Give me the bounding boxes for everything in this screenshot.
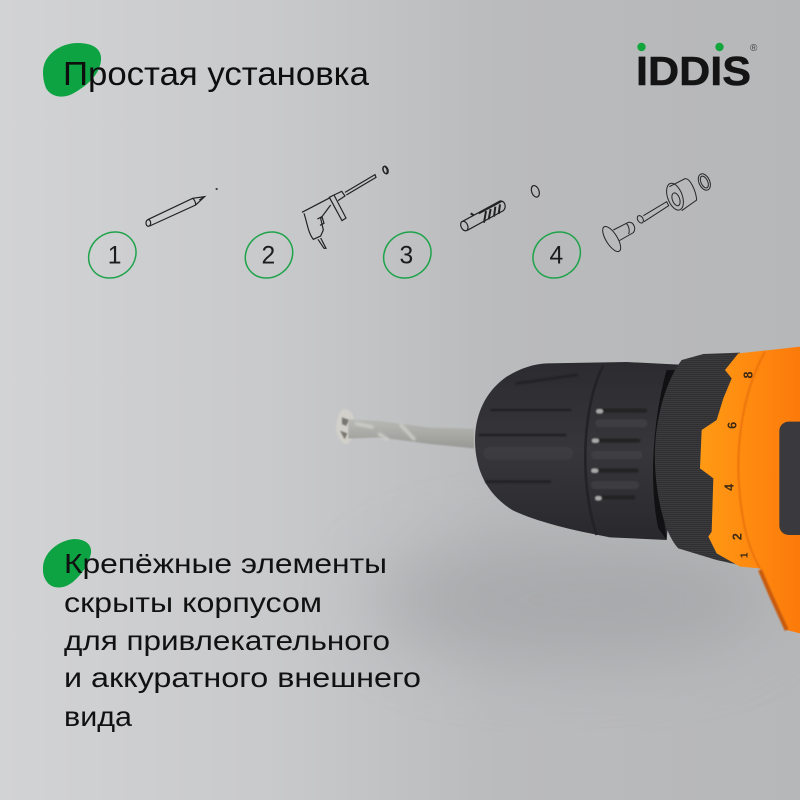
chuck: [475, 362, 679, 540]
step 3 number badge: 3: [399, 242, 413, 269]
heading text: Простая установка: [63, 55, 370, 92]
step 3 number badge: [374, 222, 440, 288]
dark switch window: [779, 422, 800, 535]
speed dial numbers: 4: [722, 484, 736, 491]
logo dot left: [637, 43, 646, 51]
icon: wall plug and hole: [382, 166, 541, 232]
description text: вида: [64, 701, 132, 732]
housing ridge: [738, 352, 765, 568]
logo wordmark: IDDIS: [636, 48, 751, 94]
icon: pencil and mark: [146, 188, 218, 226]
heading: Простая установка: [43, 43, 370, 97]
icon: hammer drill and hole: [302, 165, 389, 248]
logo dot right: [715, 43, 724, 51]
step 2 number badge: [236, 222, 302, 288]
step 3: [374, 166, 541, 288]
drill bit: [348, 419, 474, 448]
orange drill housing: [700, 347, 800, 633]
step 2 number badge: 2: [261, 242, 275, 269]
logo: IDDIS: [636, 43, 758, 94]
registered mark: ®: [750, 43, 758, 54]
speed dial numbers: [722, 371, 756, 558]
description text: для привлекательного: [64, 625, 390, 656]
speed dial numbers: 6: [725, 422, 739, 429]
knurled collar: [655, 353, 753, 567]
step 4 number badge: [524, 222, 590, 288]
chuck ribs: [480, 375, 645, 498]
icon: mounting hardware: [599, 172, 713, 254]
step 2: [236, 165, 389, 288]
step 1: [79, 188, 218, 288]
description text: скрыты корпусом: [64, 587, 322, 618]
description green blob: [43, 539, 91, 588]
step 1 number badge: 1: [108, 242, 122, 269]
speed dial numbers: 2: [731, 533, 745, 540]
lower housing edge: [760, 570, 787, 630]
description text: [64, 548, 421, 732]
heading green blob: [43, 43, 101, 97]
step 4: [524, 172, 713, 288]
description text: и аккуратного внешнего: [64, 662, 421, 693]
description block: [43, 539, 421, 732]
drilled hole: [336, 409, 355, 444]
photo: cordless drill drilling into wall: [336, 347, 800, 633]
description text: Крепёжные элементы: [64, 548, 387, 579]
speed dial numbers: 1: [740, 552, 751, 558]
speed dial numbers: 8: [742, 371, 756, 379]
step 4 number badge: 4: [549, 242, 563, 269]
